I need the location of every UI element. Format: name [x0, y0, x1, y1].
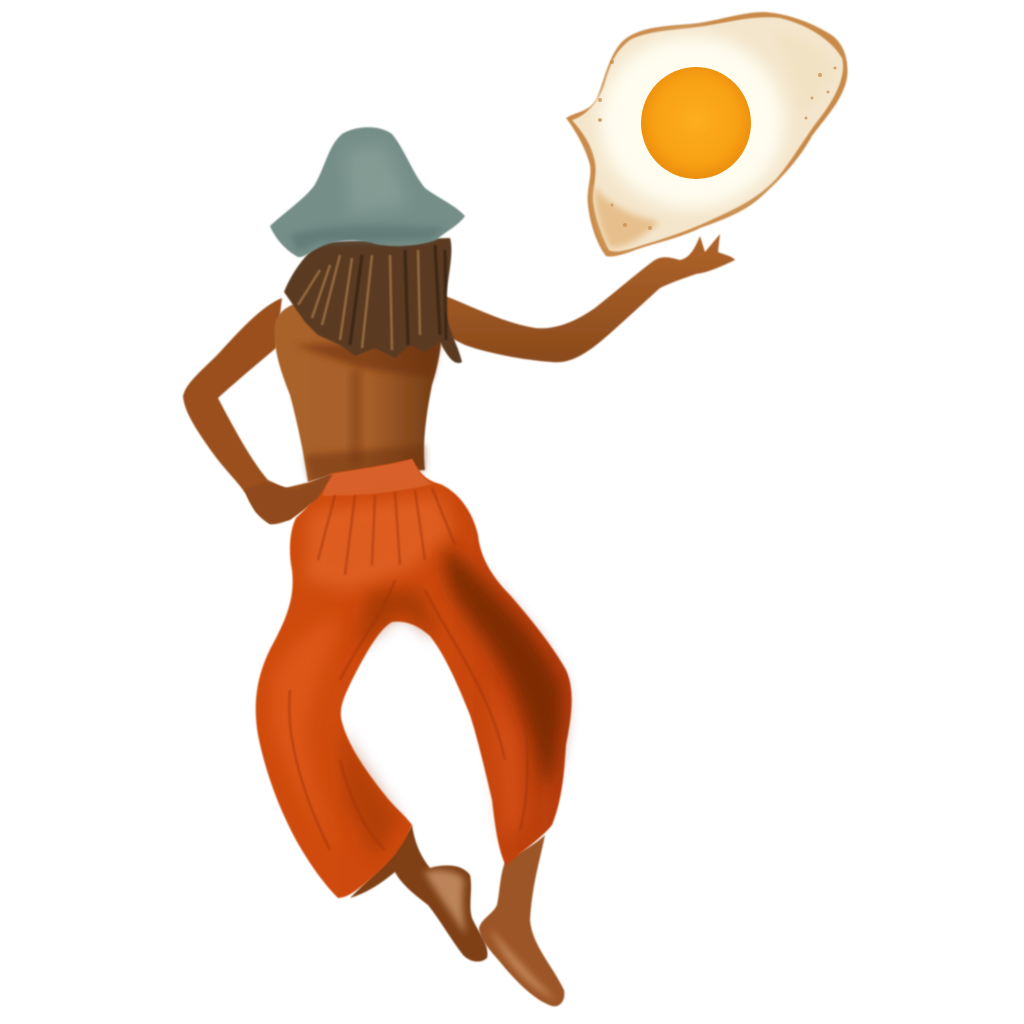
torso — [274, 300, 442, 482]
hat light shading — [345, 145, 410, 215]
pants highlight back leg — [490, 680, 525, 840]
hair light strands — [298, 250, 420, 350]
fried egg — [566, 12, 847, 257]
front leg lower — [350, 825, 487, 962]
egg browning spots — [598, 60, 836, 230]
back leg lower — [479, 835, 564, 1006]
hair dark strands — [350, 245, 446, 345]
pants shadow centre — [355, 590, 440, 650]
pants folds — [289, 488, 528, 850]
waist shadow — [305, 445, 425, 482]
front foot highlight — [424, 870, 466, 935]
egg crust bottom-left — [594, 185, 660, 248]
pants — [256, 459, 572, 898]
pants shadow front cuff — [340, 730, 400, 860]
egg white bright center — [600, 36, 784, 208]
egg lobe cream tone — [770, 30, 835, 115]
pants highlight left — [272, 620, 340, 850]
torso shadow under hair — [295, 340, 440, 378]
hair — [284, 238, 462, 363]
hat brim shadow — [290, 225, 445, 252]
egg white — [572, 17, 843, 251]
right arm — [445, 234, 735, 362]
spine shading — [350, 370, 362, 465]
left arm — [183, 298, 333, 524]
hand on hip — [244, 474, 333, 524]
pants shadow right — [444, 545, 562, 790]
pants waistband — [322, 459, 432, 496]
figure — [183, 127, 735, 1006]
bucket hat — [270, 127, 465, 257]
back foot highlight — [490, 928, 556, 1000]
egg yolk — [641, 67, 751, 179]
pants highlight seat — [305, 495, 455, 590]
egg crispy edge — [566, 12, 847, 257]
